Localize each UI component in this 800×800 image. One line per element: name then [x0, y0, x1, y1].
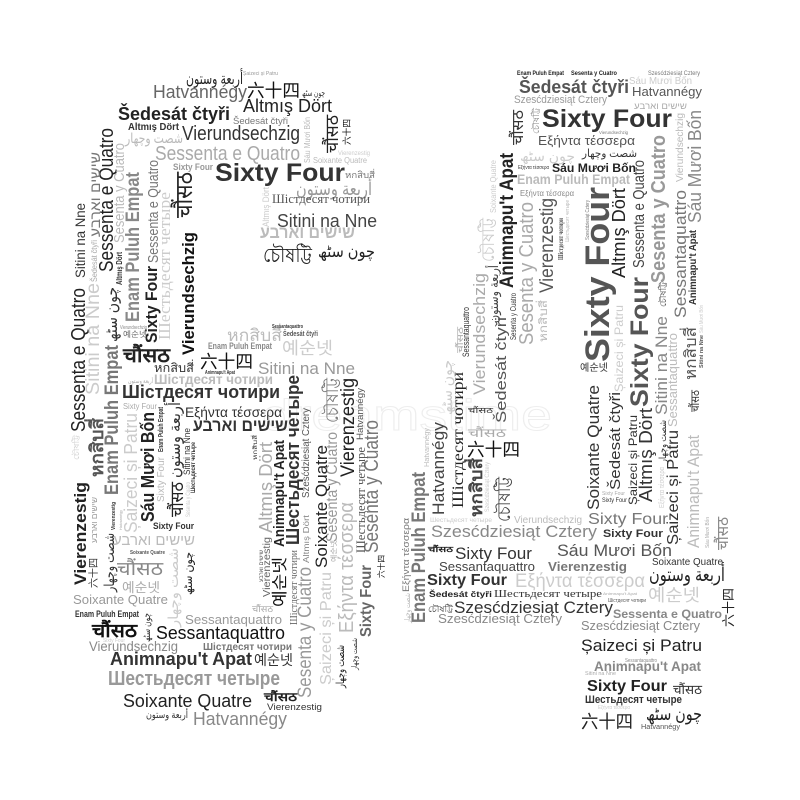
- digit 6: left stem words: [68, 128, 198, 593]
- digit 6: top arc words: شصت وچهار: [124, 130, 183, 147]
- digit 6: bowl top words: Εξήντα τέσσερα: [185, 404, 282, 420]
- digit 6: top arc words: Altmış Dört: [261, 187, 271, 227]
- digit 4: top words: شصت وچهار: [581, 148, 637, 160]
- digit 6: left stem words: Hatvannégy: [118, 510, 123, 530]
- digit 6: bowl top words: चौंसठ: [122, 343, 171, 367]
- digit 6: bowl top words: หกสิบสี่: [227, 323, 283, 345]
- digit 4: foot words: چون سٹھ: [646, 704, 702, 725]
- digit 4: central column words: Animnapu't Apat: [687, 230, 699, 305]
- digit 6: left stem words: Sixty Four: [142, 266, 161, 343]
- digit 6: left stem words: Sitini na Nne: [72, 203, 88, 278]
- digit 4: top words: Szesćdziesiąt Cztery: [648, 71, 700, 77]
- digit 4: top words: Enam Puluh Empat: [517, 71, 564, 77]
- digit 4: top words: Εξήντα τέσσερα: [538, 133, 636, 148]
- digit 4: central column words: চৌষট্টি: [477, 217, 498, 262]
- digit 6: left stem words: चौंसठ: [170, 171, 198, 218]
- digit 6: top arc words: [118, 68, 377, 267]
- digit 6: left stem words: Шестьдесят четыре: [155, 192, 174, 340]
- digit 4: diagonal stroke words: Hatvannégy: [424, 427, 431, 467]
- digit 6: lower bowl words: Шістдесят чотири: [203, 642, 292, 653]
- digit 4: foot words: 六十四: [581, 712, 633, 732]
- digit 6: bowl top words: Animnapu't Apat: [205, 370, 235, 376]
- digit 6: left stem words: চৌষট্টি: [72, 434, 81, 460]
- digit 6: bowl right side words: Sesenta y Cuatro: [295, 567, 316, 698]
- digit 6: left stem words: Sessenta e Quatro: [96, 128, 118, 272]
- digit 4: top words: [508, 70, 705, 283]
- digit 6: bowl top words: 六十四: [200, 352, 253, 372]
- digit 6: left stem words: أربعة وستون: [164, 402, 185, 478]
- digit 4: central column words: Sitini na Nne: [652, 316, 671, 415]
- digit 4: central column words: หกสิบสี่: [535, 300, 550, 342]
- digit 4: top words: Sáu Mươi Bốn: [629, 75, 692, 87]
- digit 6: bowl right side words: চৌষট্টি: [321, 377, 342, 423]
- digit 6: bowl right side words: Sixty Four: [358, 565, 375, 637]
- digit 6: lower bowl words: Vierundsechzig: [89, 638, 178, 654]
- digit 6: bowl right side words: चौंसठ: [252, 603, 274, 614]
- digit 4: crossbar words: Soixante Quatre: [652, 557, 723, 568]
- digit 6: lower bowl words: Soixante Quatre: [130, 550, 165, 556]
- digit 6: top arc words: Șaizeci și Patru: [243, 71, 278, 77]
- digit 6: lower bowl words: Soixante Quatre: [123, 691, 252, 711]
- word cloud: digit 6: [68, 68, 386, 729]
- word: 六十四: 六十四: [467, 440, 520, 460]
- digit 4: crossbar words: [427, 511, 736, 627]
- digit 6: left stem words: Vierundsechzig: [179, 232, 198, 355]
- digit 4: top words: चौंसठ: [508, 109, 527, 145]
- digit 4: crossbar words: Sixty Four: [427, 572, 507, 589]
- digit 4: foot words: Szesćdziesiąt Cztery: [581, 618, 700, 633]
- digit 6: bowl right side words: Altmış Dört: [256, 442, 276, 533]
- digit 4: crossbar words: Sixty Four: [455, 544, 532, 563]
- digit 4: right column words: Animnapu't Apat: [684, 435, 703, 548]
- digit 6: top arc words: Šedesát čtyři: [233, 116, 288, 126]
- digit 6: lower bowl words: شصت وچهار: [165, 548, 182, 628]
- watermark: dreamstime: [262, 391, 552, 440]
- digit 4: central column words: Soixante Quatre: [489, 159, 498, 213]
- digit 6: lower bowl words: Soixante Quatre: [73, 592, 168, 607]
- digit 4: diagonal stroke words: चौंसठ: [454, 326, 465, 353]
- digit 4: central column words: 예순넷: [580, 362, 608, 374]
- digit 4: diagonal stroke words: [401, 307, 520, 624]
- digit 4: central column words: Șaizeci și Patru: [612, 305, 626, 392]
- digit 6: left stem words: หกสิบสี่: [84, 417, 107, 477]
- digit 4: diagonal stroke words: Sessantaquattro: [461, 307, 471, 357]
- digit 6: top arc words: أربعة وستون: [186, 68, 243, 89]
- digit 4: foot words: Hatvannégy: [641, 724, 681, 731]
- digit 6: left stem words: Sixty Four: [156, 456, 167, 502]
- digit 4: diagonal stroke words: Шістдесят чотири: [450, 372, 467, 508]
- digit 6: left stem words: Sessenta e Quatro: [68, 288, 90, 432]
- digit 6: bowl top words: Шістдесят чотири: [122, 382, 280, 402]
- digit 4: crossbar words: Εξήντα τέσσερα: [515, 571, 645, 592]
- digit 6: bowl top words: Sitini na Nne: [258, 359, 355, 378]
- digit 4: central column words: أربعة وستون: [485, 265, 502, 323]
- digit 4: right column words: Șaizeci și Patru: [665, 430, 682, 545]
- word: Sixty Four large: Sixty Four: [542, 105, 672, 133]
- digit 6: bowl right side words: 예순넷: [329, 539, 338, 562]
- digit 4: central column words: Altmış Dört: [609, 188, 629, 278]
- digit 6: left stem words: Sitini na Nne: [83, 283, 104, 395]
- digit 4: foot words: Εξήντα τέσσερα: [598, 704, 630, 711]
- digit 6: bowl right side words: Шестьдесят четыре: [283, 375, 303, 545]
- digit 6: left stem words: Vierenzestig: [111, 502, 117, 530]
- digit 4: top words: Sesenta y Cuatro: [571, 70, 617, 77]
- digit 4: crossbar words: Шестьдесят четыре: [430, 517, 492, 524]
- digit 4: right column words: Soixante Quatre: [584, 385, 603, 510]
- digit 6: bowl right side words: Шістдесят чотири: [289, 549, 300, 625]
- digit 4: central column words: Sáu Mươi Bốn: [699, 305, 705, 333]
- digit 6: left stem words: Sessenta e Quatro: [145, 160, 162, 263]
- digit 6: bowl right side words: Animnapu't Apat: [271, 440, 288, 547]
- digit 6: top arc words: Soixante Quatre: [313, 156, 368, 165]
- digit 6: bowl right side words: שישים וארבע: [259, 549, 265, 582]
- digit 6: lower bowl words: Sixty Four: [103, 638, 125, 644]
- digit 4: crossbar words: Sixty Four: [588, 511, 669, 528]
- digit 6: left stem words: Sesenta y Cuatro: [111, 143, 128, 243]
- digit 6: bowl top words: Sessantaquattro: [272, 324, 303, 330]
- digit 4: crossbar words: Шестьдесят четыре: [494, 588, 602, 600]
- digit 6: bowl right side words: 예순넷: [271, 557, 289, 607]
- digit 4: top words: Sesenta y Cuatro: [648, 135, 670, 283]
- digit 6: top arc words: Sáu Mươi Bốn: [303, 117, 312, 163]
- digit 4: right column words: Sixty Four: [602, 491, 625, 497]
- digit 6: top arc words: Hatvannégy: [153, 82, 247, 102]
- digit 4: central column words: Sessenta e Quatro: [631, 160, 648, 268]
- digit 6: left stem words: Enam Puluh Empat: [158, 407, 165, 452]
- digit 4: central column words: Šedesát čtyři: [493, 317, 510, 423]
- digit 4: crossbar words: Sixty Four: [603, 528, 664, 540]
- digit 4: central column words: Sixty Four: [626, 277, 654, 407]
- digit 4: foot words: Animnapu't Apat: [594, 658, 701, 674]
- word cloud: digit 4: [401, 70, 736, 732]
- digit 6: top arc words: Šedesát čtyři: [118, 103, 230, 124]
- digit 4: right column words: Šedesát čtyři: [607, 392, 624, 490]
- digit 6: left stem words: 六十四: [87, 558, 100, 588]
- digit 6: top arc words: چون سٹھ: [302, 88, 325, 98]
- digit 4: central column words: Шестьдесят четыре: [565, 200, 571, 242]
- digit 6: lower bowl words: Vierenzestig: [267, 702, 322, 713]
- digit 4: top words: Sáu Mươi Bốn: [685, 110, 705, 223]
- digit 4: diagonal stroke words: Εξήντα τέσσερα: [401, 518, 411, 592]
- digit 6: lower bowl words: Sessantaquattro: [156, 623, 285, 643]
- digit 6: lower bowl words: [73, 532, 322, 729]
- digit 6: bowl top words: หกสิบสี่: [154, 359, 195, 375]
- digit 6: left stem words: چون سٹھ: [104, 287, 122, 342]
- digit 6: lower bowl words: أربعة وستون: [146, 708, 188, 721]
- digit 4: central column words: Vierenzestig: [537, 198, 558, 293]
- digit 6: lower bowl words: 예순넷: [122, 580, 160, 595]
- digit 6: left stem words: Șaizeci și Patru: [121, 413, 141, 533]
- digit 6: top arc words: 六十四: [341, 119, 352, 145]
- digit 6: bowl top words: Шістдесят чотири: [154, 371, 273, 387]
- digit 6: lower bowl words: چون سٹھ: [142, 613, 153, 642]
- digit 6: lower bowl words: چون سٹھ: [181, 552, 196, 595]
- digit 4: diagonal stroke words: Szesćdziesiąt Cztery: [485, 462, 491, 512]
- digit 6: bowl right side words: Sesenta y Cuatro: [361, 420, 383, 553]
- digit 6: left stem words: Vierundsechzig: [120, 325, 147, 331]
- digit 4: diagonal stroke words: หกสิบสี่: [464, 457, 486, 517]
- digit 4: right column words: चौंसठ: [713, 516, 732, 550]
- digit 6: left stem words: Enam Puluh Empat: [102, 344, 123, 495]
- digit 4: crossbar words: Szesćdziesiąt Cztery: [454, 598, 613, 617]
- digit 6: lower bowl words: चौंसठ: [91, 619, 138, 642]
- digit 6: left stem words: Sesenta y Cuatro: [186, 481, 192, 517]
- digit 4: right column words: Sáu Mươi Bốn: [705, 517, 711, 548]
- digit 6: left stem words: Sitini na Nne: [182, 428, 192, 475]
- digit 4: crossbar words: 예순넷: [648, 586, 700, 605]
- digit 4: crossbar words: Vierundsechzig: [514, 515, 582, 526]
- digit 4: crossbar words: Animnapu't Apat: [603, 591, 638, 596]
- digit 6: top arc words: চৌষট্টি: [263, 243, 312, 267]
- digit 4: diagonal stroke words: चौंसठ: [468, 405, 493, 415]
- digit 4: top words: Vierundsechzig: [599, 130, 628, 135]
- digit 6: top arc words: Шістдесят чотири: [272, 191, 370, 206]
- digit 4: crossbar words: Sessenta e Quatro: [613, 607, 722, 621]
- digit 6: lower bowl words: Sessantaquattro: [185, 612, 282, 627]
- digit 6: lower bowl words: चौंसठ: [117, 557, 164, 580]
- digit 6: top arc words: چون سٹھ: [318, 242, 375, 262]
- digit 6: left stem words: Шестьдесят четыре: [191, 441, 197, 493]
- digit 4: top words: שישים וארבע: [634, 101, 687, 111]
- digit 4: crossbar words: চৌষট্টি: [428, 604, 453, 614]
- digit 4: right column words: चौंसठ: [688, 389, 702, 412]
- digit 4: crossbar words: أربعة وستون: [649, 562, 725, 586]
- digit 6: bowl right side words: شصت وچهار: [350, 638, 359, 671]
- digit 4: crossbar words: Szesćdziesiąt Cztery: [438, 611, 563, 626]
- digit 6: lower bowl words: שישים וארבע: [113, 532, 195, 549]
- digit 6: left stem words: Šedesát čtyři: [90, 240, 99, 282]
- digit 4: top words: Szesćdziesiąt Cztery: [514, 94, 607, 106]
- digit 6: lower bowl words: Шестьдесят четыре: [108, 668, 280, 690]
- digit 4: central column words: Animnapu't Apat: [497, 152, 518, 288]
- digit 6: bowl right side words: [251, 375, 386, 698]
- digit 4: right column words: Εξήντα τέσσερα: [658, 467, 666, 508]
- digit 6: left stem words: Vierenzestig: [71, 482, 90, 585]
- digit 6: bowl right side words: Szesćdziesiąt Cztery: [301, 408, 312, 498]
- digit 6: left stem words: Altmış Dört: [115, 252, 124, 285]
- digit 6: left stem words: चौंसठ: [166, 482, 187, 517]
- digit 4: crossbar words: Vierenzestig: [548, 559, 627, 574]
- digit 6: bowl right side words: หกสิบสี่: [251, 435, 259, 460]
- digit 6: top arc words: Vierenzestig: [338, 151, 370, 157]
- digit 4: right column words: Șaizeci și Patru: [626, 415, 640, 505]
- digit 4: foot words: [581, 618, 702, 732]
- word: Sixty Four large: Sixty Four: [215, 159, 345, 187]
- digit 6: left stem words: Sixty Four: [153, 521, 194, 531]
- digit 6: bowl top words: Enam Puluh Empat: [208, 341, 272, 351]
- digit 4: diagonal stroke words: شصت وچهار: [403, 593, 412, 624]
- digit 4: diagonal stroke words: Hatvannégy: [429, 421, 448, 515]
- digit 4: central column words: [470, 152, 705, 427]
- digit 6: bowl right side words: Sesenta y Cuatro: [324, 432, 341, 542]
- digit 6: left stem words: Sáu Mươi Bốn: [138, 412, 158, 522]
- digit 6: lower bowl words: Animnapu't Apat: [110, 649, 252, 669]
- digit 6: top arc words: Altmış Dört: [243, 96, 332, 116]
- digit 6: bowl right side words: 六十四: [376, 555, 386, 578]
- digit 4: foot words: Шестьдесят четыре: [585, 694, 682, 706]
- digit 6: bowl top words: 예순넷: [282, 339, 333, 358]
- digit 4: diagonal stroke words: चौंसठ: [468, 426, 508, 440]
- digit 4: foot words: Sessantaquattro: [625, 658, 657, 664]
- digit 4: diagonal stroke words: چون سٹھ: [439, 360, 456, 415]
- digit 4: top words: চৌষট্টি: [531, 108, 541, 134]
- digit 4: crossbar words: Šedesát čtyři: [429, 588, 492, 599]
- digit 6: top arc words: 六十四: [247, 81, 300, 101]
- digit 4: top words: Hatvannégy: [632, 84, 702, 99]
- digit 6: bowl right side words: Șaizeci și Patru: [318, 572, 335, 685]
- digit 6: top arc words: أربعة وستون: [296, 177, 372, 200]
- digit 4: diagonal stroke words: চৌষট্টি: [493, 476, 514, 522]
- digit 6: lower bowl words: 예순넷: [254, 652, 293, 668]
- digit 4: top words: Εξήντα τέσσερα: [520, 189, 574, 198]
- digit 4: crossbar words: Sessantaquattro: [439, 559, 535, 574]
- digit 4: top words: چون سٹھ: [520, 148, 575, 165]
- digit 6: bowl right side words: شصت وچهار: [335, 645, 347, 689]
- digit 4: crossbar words: Шістдесят чотири: [608, 598, 646, 604]
- digit 4: central column words: Sitini na Nne: [699, 335, 705, 368]
- digit 4: crossbar words: चौंसठ: [427, 544, 453, 554]
- digit 6: bowl right side words: Εξήντα τέσσερα: [336, 502, 358, 633]
- digit 6: top arc words: Altmış Dört: [128, 122, 180, 133]
- digit 6: left stem words: 예순넷: [123, 329, 147, 339]
- digit 4: top words: Εξήντα τέσσερα: [518, 164, 549, 171]
- digit 4: right column words: Altmış Dört: [636, 408, 656, 502]
- digit 6: top arc words: Vierundsechzig: [182, 123, 300, 145]
- digit 6: top arc words: Sixty Four: [173, 162, 213, 172]
- digit 4: central column words: Sesenta y Cuatro: [509, 293, 518, 340]
- digit 6: bowl top words: Šedesát čtyři: [283, 329, 318, 338]
- digit 6: lower bowl words: चौंसठ: [263, 690, 298, 704]
- digit 4: top words: Enam Puluh Empat: [517, 171, 630, 187]
- digit 6: left stem words: شصت وچهار: [101, 533, 118, 593]
- digit 6: bowl right side words: Vierenzestig: [262, 537, 273, 597]
- digit 4: central column words: Sessantaquattro: [665, 333, 680, 427]
- digit 4: central column words: Sessantaquattro: [671, 190, 690, 318]
- digit 4: foot words: Șaizeci și Patru: [581, 636, 702, 655]
- digit 4: central column words: Vierundsechzig: [470, 273, 489, 395]
- digit 6: lower bowl words: Enam Puluh Empat: [75, 609, 139, 619]
- digit 6: bowl top words: שישים וארבע: [193, 416, 288, 435]
- digit 4: central column words: চৌষট্টি: [658, 282, 668, 307]
- digit 4: foot words: Sitini na Nne: [585, 671, 616, 677]
- digit 4: central column words: หกสิบสี่: [679, 327, 700, 380]
- digit 4: crossbar words: Szesćdziesiąt Cztery: [431, 522, 598, 541]
- digit 6: top arc words: שישים וארבע: [260, 223, 355, 242]
- digit 6: left stem words: שישים וארבע: [90, 497, 99, 543]
- digit 6: bowl top words: [122, 323, 355, 435]
- digit 4: top words: Sáu Mươi Bốn: [552, 161, 636, 175]
- digit 4: central column words: Sesenta y Cuatro: [516, 202, 538, 345]
- digit 4: diagonal stroke words: Enam Puluh Empat: [409, 471, 430, 623]
- digit 4: right column words: [584, 385, 732, 550]
- digit 4: central column words: Шістдесят чотири: [557, 218, 565, 260]
- digit 6: lower bowl words: Hatvannégy: [193, 709, 287, 729]
- digit 4: crossbar words: Sáu Mươi Bốn: [557, 541, 672, 560]
- digit 4: foot words: चौंसठ: [673, 682, 702, 697]
- digit 6: top arc words: Sitini na Nne: [277, 211, 377, 231]
- digit 6: bowl top words: Sixty Four: [123, 402, 157, 411]
- digit 6: bowl right side words: Altmış Dört: [302, 514, 311, 563]
- digit 6: bowl top words: أربعة وستون: [128, 377, 153, 385]
- digit 4: top words: Vierundsechzig: [675, 113, 686, 182]
- digit 6: bowl right side words: Vierenzestig: [338, 378, 359, 477]
- digit 6: bowl right side words: Hatvannégy: [355, 387, 365, 440]
- digit 4: right column words: Sixty Four: [602, 498, 627, 504]
- digit 6: top arc words: หกสิบสี่: [345, 168, 376, 180]
- word: Sixty Four largest: Sixty Four: [579, 187, 617, 362]
- digit 6: bowl right side words: Шестьдесят четыре: [353, 447, 368, 553]
- digit 4: top words: Šedesát čtyři: [519, 76, 629, 97]
- digit 6: left stem words: שישים וארבע: [87, 152, 103, 237]
- digit 4: central column words: Szesćdziesiąt Cztery: [585, 200, 591, 240]
- digit 6: top arc words: चौंसठ: [321, 114, 342, 153]
- digit 6: left stem words: Enam Puluh Empat: [123, 171, 144, 322]
- digit 4: crossbar words: 六十四: [721, 588, 736, 627]
- digit 6: bowl right side words: Soixante Quatre: [312, 445, 331, 568]
- digit 6: top arc words: Sessenta e Quatro: [155, 143, 300, 165]
- digit 4: foot words: Sixty Four: [587, 678, 667, 695]
- digit 4: right column words: شصت وچهار: [658, 420, 669, 464]
